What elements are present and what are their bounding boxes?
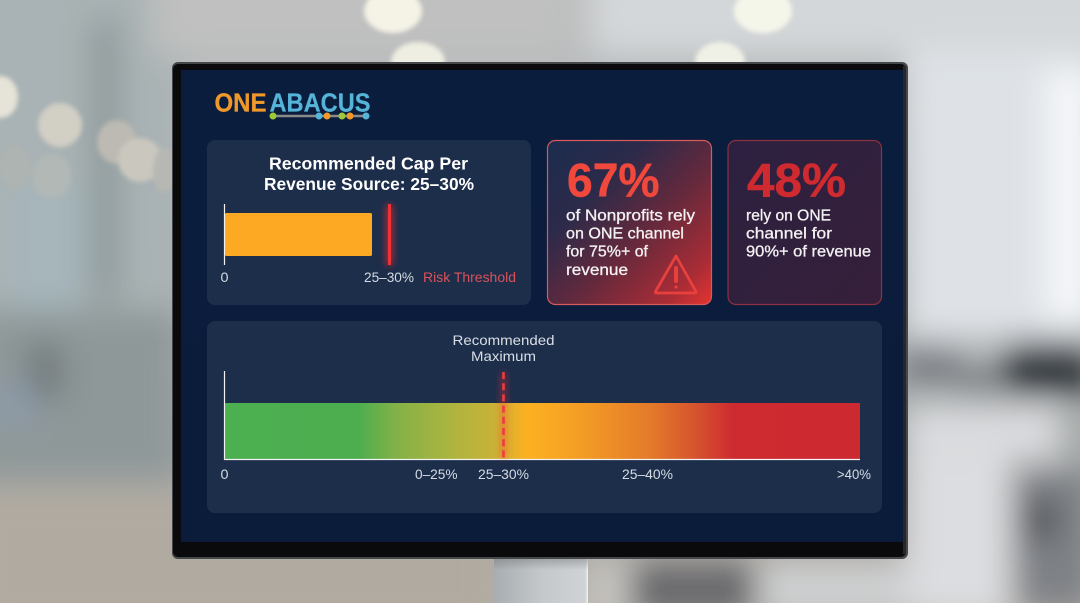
- icon: warning triangle: [655, 256, 696, 293]
- recommended maximum dashed marker: [500, 372, 506, 459]
- heading: recommended cap: Recommended Cap Per: [269, 154, 468, 174]
- panel: risk gradient scale: [207, 321, 882, 513]
- heading: recommended cap: [264, 154, 474, 194]
- text: 67% description: revenue: [566, 262, 628, 279]
- scale labels: 25–40%: [622, 466, 673, 482]
- scale labels: >40%: [837, 466, 871, 482]
- stat: 67%: 67%: [567, 154, 660, 206]
- text: 48% description: 90%+ of revenue: [746, 244, 871, 260]
- screen background: [181, 70, 903, 542]
- scale labels: 25–30%: [478, 466, 529, 482]
- panel: recommended cap per revenue source: [207, 140, 531, 305]
- monitor bezel: [172, 62, 908, 559]
- text: 67% description: of Nonprofits rely: [566, 208, 695, 224]
- text: 67% description: for 75%+ of: [566, 244, 649, 260]
- text: 48% description: rely on ONE: [746, 208, 831, 224]
- stat: 48%: 48%: [747, 154, 846, 206]
- risk threshold marker: [386, 204, 393, 265]
- bar axis labels: [220, 269, 516, 285]
- scale labels: 0: [220, 466, 229, 482]
- label: recommended maximum: Recommended: [452, 332, 554, 348]
- logo: OneAbacus: [214, 90, 370, 120]
- scale labels: 0–25%: [415, 466, 458, 482]
- card: 48% statistic: [728, 140, 882, 304]
- gradient risk bar: [224, 371, 860, 460]
- label: recommended maximum: [452, 332, 554, 364]
- text: 48% description: [746, 208, 871, 260]
- bar axis labels: 0: [220, 269, 229, 285]
- card: 67% statistic: [548, 140, 712, 304]
- text: 67% description: [566, 208, 695, 279]
- orange bar chart: [224, 204, 372, 265]
- logo: OneAbacus: ABACUS: [270, 90, 370, 118]
- text: 67% description: on ONE channel: [566, 226, 684, 242]
- bar axis labels: Risk Threshold: [423, 269, 516, 285]
- label: recommended maximum: Maximum: [471, 348, 536, 364]
- heading: recommended cap: Revenue Source: 25–30%: [264, 174, 474, 194]
- bar axis labels: 25–30%: [364, 269, 414, 285]
- text: 48% description: channel for: [746, 226, 832, 242]
- scale labels: [220, 466, 871, 482]
- logo: OneAbacus: ONE: [214, 90, 266, 118]
- monitor stand: [494, 556, 588, 603]
